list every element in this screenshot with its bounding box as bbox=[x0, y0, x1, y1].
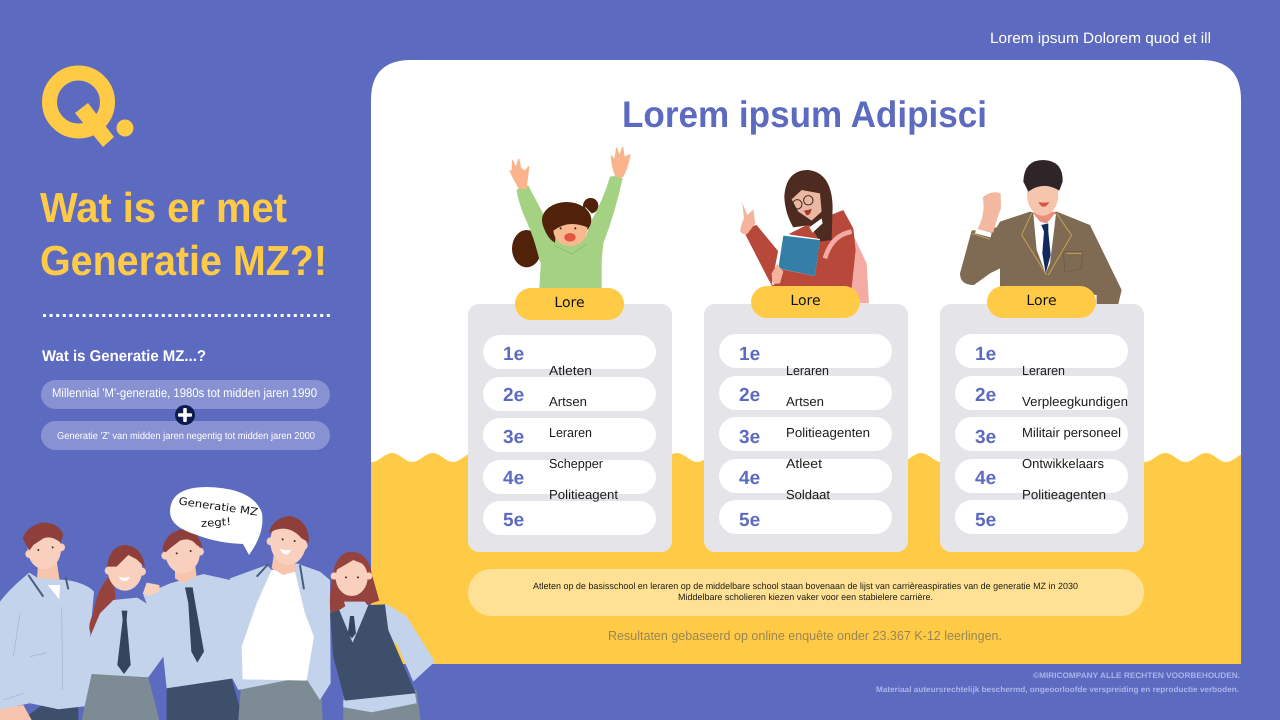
labels: column 3: Militair personeel bbox=[1022, 425, 1121, 440]
definition pill: generation Z: Generatie 'Z' van midden jaren negentig tot midden jaren 2000 bbox=[57, 431, 315, 442]
labels: column 3: Politieagenten bbox=[1022, 487, 1106, 502]
ranks: column 3 bbox=[975, 344, 996, 531]
copyright footer: ©MIRICOMPANY ALLE RECHTEN VOORBEHOUDEN. bbox=[1033, 671, 1240, 680]
student 3 bbox=[143, 529, 243, 720]
labels: column 1: Atleten bbox=[549, 363, 592, 378]
title: Wat is er met bbox=[40, 184, 287, 231]
dotted divider bbox=[43, 314, 330, 317]
copyright footer: Materiaal auteursrechtelijk beschermd, ongeoorloofde verspreiding en reproductie verboden. bbox=[876, 685, 1239, 694]
ranks: column 1: 2e bbox=[503, 385, 524, 406]
icon: plus bbox=[175, 405, 195, 425]
ranks: column 2: 4e bbox=[739, 468, 760, 489]
logo: Q. bbox=[50, 73, 134, 147]
heading: main card: Lorem ipsum Adipisci bbox=[622, 94, 987, 135]
speech bubble: zegt! bbox=[201, 516, 231, 530]
callout: summary: Middelbare scholieren kiezen vaker voor een stabielere carrière. bbox=[678, 592, 933, 602]
ranks: column 2: 2e bbox=[739, 385, 760, 406]
labels: column 3: Ontwikkelaars bbox=[1022, 456, 1104, 471]
labels: column 3 bbox=[1022, 363, 1128, 502]
card: column 1 bbox=[468, 288, 672, 552]
student 4 bbox=[230, 516, 331, 720]
ranks: column 1 bbox=[503, 344, 524, 531]
labels: column 3: Leraren bbox=[1022, 363, 1065, 378]
header text: Lorem ipsum Dolorem quod et ill bbox=[990, 30, 1211, 47]
labels: column 2: Leraren bbox=[786, 363, 829, 378]
badge: column 1: Lore bbox=[554, 295, 585, 311]
labels: column 1 bbox=[549, 363, 618, 502]
ranks: column 2: 3e bbox=[739, 427, 760, 448]
labels: column 2: Soldaat bbox=[786, 487, 830, 502]
ranks: column 1: 1e bbox=[503, 344, 524, 365]
ranks: column 3: 1e bbox=[975, 344, 996, 365]
row pills: column 2 bbox=[719, 334, 892, 534]
ranks: column 2 bbox=[739, 344, 760, 531]
callout: summary bbox=[468, 569, 1144, 616]
ranks: column 3: 4e bbox=[975, 468, 996, 489]
illustration: student with book bbox=[740, 170, 869, 303]
row pills: column 1 bbox=[483, 335, 656, 535]
labels: column 2: Atleet bbox=[786, 456, 822, 471]
ranks: column 2: 5e bbox=[739, 510, 760, 531]
labels: column 1: Schepper bbox=[549, 456, 604, 471]
badge: column 3: Lore bbox=[1026, 293, 1057, 309]
badge: column 1 bbox=[515, 288, 624, 320]
illustration: man in brown blazer bbox=[960, 160, 1122, 304]
ranks: column 1: 3e bbox=[503, 427, 524, 448]
badge: column 3 bbox=[987, 286, 1096, 318]
labels: column 2: Artsen bbox=[786, 394, 824, 409]
student 2 bbox=[82, 545, 163, 720]
ranks: column 3: 5e bbox=[975, 510, 996, 531]
labels: column 1: Politieagent bbox=[549, 487, 618, 502]
labels: column 1: Artsen bbox=[549, 394, 587, 409]
row pills: column 3 bbox=[955, 334, 1128, 534]
card: column 2 bbox=[704, 286, 908, 552]
ranks: column 3: 3e bbox=[975, 427, 996, 448]
ranks: column 3: 2e bbox=[975, 385, 996, 406]
title bbox=[40, 184, 327, 284]
illustration: group of five students bbox=[0, 516, 435, 720]
student 1 bbox=[0, 523, 97, 720]
labels: column 1: Leraren bbox=[549, 425, 592, 440]
source note: Resultaten gebaseerd op online enquête onder 23.367 K-12 leerlingen. bbox=[608, 628, 1002, 643]
labels: column 2 bbox=[786, 363, 870, 502]
illustration: girl in green sweater bbox=[510, 147, 630, 288]
labels: column 3: Verpleegkundigen bbox=[1022, 394, 1128, 409]
wave: yellow lower band bbox=[371, 453, 1247, 664]
copyright footer bbox=[876, 671, 1240, 694]
labels: column 2: Politieagenten bbox=[786, 425, 870, 440]
ranks: column 1: 4e bbox=[503, 468, 524, 489]
definition pill: millennial bbox=[41, 380, 330, 409]
speech bubble: Generatie MZ bbox=[178, 496, 259, 519]
student 5 bbox=[330, 552, 435, 720]
panel: main white card bbox=[371, 60, 1241, 664]
badge: column 2 bbox=[751, 286, 860, 318]
subheading: Wat is Generatie MZ...? bbox=[42, 348, 206, 365]
definition pill: millennial: Millennial 'M'-generatie, 1980s tot midden jaren 1990 bbox=[52, 386, 317, 400]
speech bubble bbox=[170, 487, 262, 555]
card: column 3 bbox=[940, 286, 1144, 552]
ranks: column 2: 1e bbox=[739, 344, 760, 365]
badge: column 2: Lore bbox=[790, 293, 821, 309]
title: Generatie MZ?! bbox=[40, 237, 327, 284]
callout: summary: Atleten op de basisschool en leraren op de middelbare school staan bovenaan de lijst van carrièreaspiraties van de generatie MZ in 2030 bbox=[533, 581, 1078, 591]
ranks: column 1: 5e bbox=[503, 510, 524, 531]
definition pill: generation Z bbox=[41, 421, 330, 450]
